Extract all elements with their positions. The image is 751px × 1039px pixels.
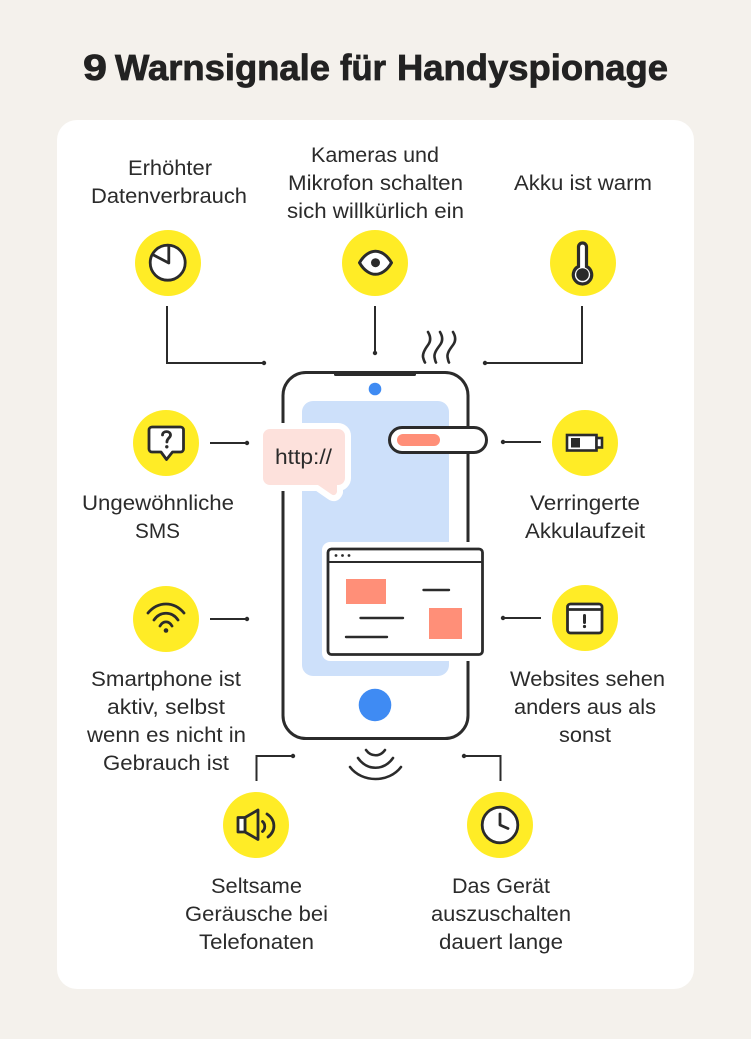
title: Handyspionage: [397, 47, 668, 88]
icon: speaker: [223, 792, 289, 858]
phone notch: [334, 371, 416, 376]
text: Websites sehen anders aus: [510, 667, 665, 747]
icon: message with question mark: [133, 410, 199, 476]
text: Das Gerät auszuschalten: dauert lange: [439, 930, 563, 954]
icon: pie chart: [135, 230, 201, 296]
text: Das Gerät auszuschalten: [431, 874, 571, 954]
text: Smartphone ist aktiv: Smartphone ist: [91, 667, 241, 691]
text: Kameras und Mikrofon: [287, 143, 464, 223]
content block 2: [429, 608, 462, 639]
connector: battery warm to phone: [483, 306, 582, 365]
connector: SMS to phone: [210, 441, 249, 445]
text: Smartphone ist aktiv: Gebrauch ist: [103, 751, 229, 775]
toggle fill: [397, 434, 440, 446]
panel: white card: [57, 120, 694, 989]
title: Warnsignale: [115, 47, 330, 88]
title: 9: [83, 47, 107, 88]
icon: low battery: [552, 410, 618, 476]
text: Erhöhter Datenverbrauch: Datenverbrauch: [91, 184, 247, 208]
phone illustration: [283, 371, 468, 738]
text: Ungewöhnliche SMS: Ungewöhnliche: [82, 491, 234, 515]
text: Das Gerät auszuschalten: auszuschalten: [431, 902, 571, 926]
battery toggle bar: [390, 428, 486, 452]
camera dot: [369, 383, 381, 395]
icon: browser warning: [552, 585, 618, 651]
window frame: [328, 549, 482, 654]
text: Seltsame Geräusche: Geräusche bei: [185, 902, 328, 926]
text: Smartphone ist aktiv: wenn es nicht in: [86, 723, 246, 747]
connector: smartphone active to phone: [210, 617, 249, 621]
text: Ungewöhnliche SMS: SMS: [135, 519, 180, 543]
connector: data usage to phone: [167, 306, 266, 365]
icon: clock: [467, 792, 533, 858]
icon: eye: [342, 230, 408, 296]
bubble shape: [263, 429, 345, 495]
title: für: [340, 47, 386, 88]
connector: noises to phone: [256, 754, 295, 781]
text: Websites sehen anders aus: Websites sehen: [510, 667, 665, 691]
sound waves: [350, 750, 401, 779]
connector: camera to phone: [373, 306, 377, 355]
content lines: [346, 590, 449, 637]
text: Seltsame Geräusche: Telefonaten: [199, 930, 314, 954]
http speech bubble: [263, 429, 345, 495]
text: Erhöhter Datenverbrauch: [91, 156, 247, 208]
window dots: [335, 554, 350, 557]
icon: thermometer: [550, 230, 616, 296]
title: [83, 47, 668, 88]
text: Erhöhter Datenverbrauch: Erhöhter: [128, 156, 212, 180]
text: Kameras und Mikrofon: Mikrofon schalten: [288, 171, 463, 195]
phone body: [283, 372, 468, 738]
icon: wifi: [133, 586, 199, 652]
window halo: [322, 542, 489, 661]
content block 1: [346, 579, 386, 604]
text: Websites sehen anders aus: anders aus als: [514, 695, 656, 719]
text: Smartphone ist aktiv: [86, 667, 246, 775]
home button: [359, 689, 391, 721]
text: Seltsame Geräusche: Seltsame: [211, 874, 302, 898]
connector: shutdown to phone: [462, 754, 500, 781]
text: Kameras und Mikrofon: Kameras und: [311, 143, 439, 167]
phone screen: [302, 401, 449, 676]
heat waves: [423, 332, 455, 362]
text: Ungewöhnliche SMS: [82, 491, 234, 543]
text: Verringerte Akkulaufzeit: Verringerte: [530, 491, 640, 515]
connector: battery life to phone: [501, 440, 541, 444]
text: Smartphone ist aktiv: aktiv, selbst: [107, 695, 225, 719]
text: Verringerte Akkulaufzeit: Akkulaufzeit: [525, 519, 645, 543]
connector: websites to phone: [501, 616, 541, 620]
browser window: [322, 542, 489, 661]
bubble text: http://: [275, 445, 332, 469]
text: Seltsame Geräusche: [185, 874, 328, 954]
text: Verringerte Akkulaufzeit: [525, 491, 645, 543]
text: Kameras und Mikrofon: sich willkürlich ein: [287, 199, 464, 223]
text: Akku ist warm: Akku ist warm: [514, 171, 652, 195]
text: Websites sehen anders aus: sonst: [559, 723, 611, 747]
text: Das Gerät auszuschalten: Das Gerät: [452, 874, 550, 898]
